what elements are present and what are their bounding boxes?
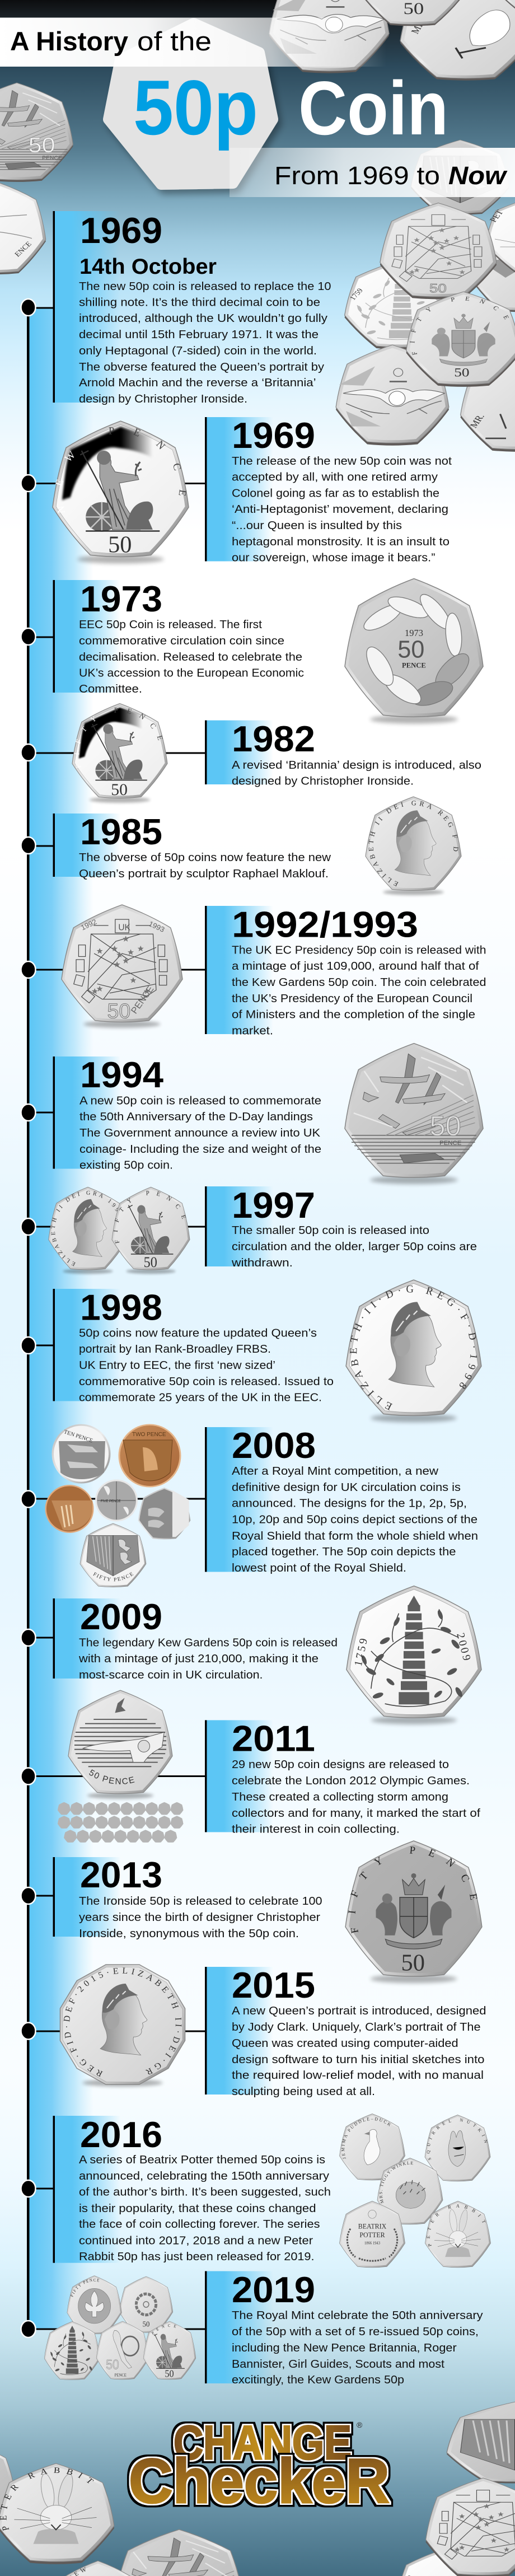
2009: body text: most-scarce coin in UK circulation. <box>79 1668 263 1681</box>
coin: Peter Rabbit small: PETER RABBIT <box>427 2204 486 2246</box>
title: A History of the: A History <box>10 26 128 56</box>
coin: 1969 Britannia New Pence: 50 <box>108 531 132 558</box>
1973: year: 1973 <box>80 578 162 619</box>
1969 left block background <box>53 211 121 403</box>
2008: body text: After a Royal Mint competition, a new <box>232 1465 438 1478</box>
2011: body text: collectors and for many, it marked the start of <box>232 1807 480 1820</box>
coin: 1985 Makhlouf portrait: ELIZABETH II DEI GRA REG F D <box>368 801 458 887</box>
footer coin: D-Day <box>115 2530 243 2576</box>
1969 right: body text: heptagonal monstrosity. It is an insult to <box>232 535 450 548</box>
1969 right: body text: ‘Anti-Heptagonist’ movement, declaring <box>232 503 448 516</box>
1992/1993: year: 1992/1993 <box>232 904 418 945</box>
footer coin: Peter Rabbit <box>0 2463 114 2564</box>
1969 left: year: 1969 <box>80 210 162 251</box>
1969 right: body text: “...our Queen is insulted by this <box>232 519 402 532</box>
1969 left: body text: introduced, although the UK wouldn’t go fully <box>79 312 328 325</box>
timeline nodes <box>21 299 36 2337</box>
decorative coin: left D-Day: 50 <box>29 133 55 157</box>
coin: 2011 Olympic aquatics: 50 PENCE <box>89 1769 134 1784</box>
logo: Change Checker: CHANGE <box>174 2416 352 2470</box>
2016: body text: of the author’s birth. It’s been suggested, such <box>79 2186 331 2199</box>
title: A History of the: of the <box>137 26 212 56</box>
2019: year: 2019 <box>232 2269 315 2310</box>
1992 block background <box>205 906 273 1034</box>
2011 block background <box>205 1720 273 1832</box>
cluster coin: Royal arms: 50 <box>454 366 469 380</box>
timeline: blue band <box>29 308 93 2329</box>
2015: year: 2015 <box>232 1965 315 2005</box>
coin: 2009 Kew Gardens: 1759 <box>352 1635 371 1667</box>
coin: 5p: FIVE PENCE <box>101 1500 121 1503</box>
1994: body text <box>79 1095 321 1171</box>
1973: body text: decimalisation. Released to celebrate the <box>79 651 302 663</box>
cluster coin: Royal arms: FIFTY PENCE <box>410 297 509 355</box>
1994 block background <box>53 1056 121 1169</box>
2016: body text: is their popularity, that these coins changed <box>79 2202 316 2215</box>
1992/1993: body text: The UK EC Presidency 50p coin is released with <box>232 944 486 957</box>
coins: 2008 Royal Shield set <box>45 1424 190 1587</box>
1982 block background <box>205 721 273 784</box>
2013: body text: Ironside, synonymous with the 50p coin. <box>79 1927 299 1940</box>
coin: 2p <box>119 1424 181 1487</box>
subtitle: From 1969 to Now: From 1969 to <box>274 161 440 190</box>
1998: body text: 50p coins now feature the updated Queen’s <box>79 1327 317 1340</box>
2019: body text <box>232 2309 483 2386</box>
decorative coin: top 50 coin: 50 <box>403 0 424 18</box>
decorative coin: top right stack Mr Jeremy <box>400 0 515 81</box>
decorative cluster coin: shield behind title band <box>411 140 509 215</box>
coin: Beatrix Potter portrait ring: POTTER <box>359 2231 386 2239</box>
2009: body text <box>78 1637 338 1681</box>
subtitle band <box>230 148 515 197</box>
coin: Mrs Tiggy-Winkle <box>377 2158 443 2224</box>
subtitle: From 1969 to Now: Now <box>448 161 508 190</box>
coins: 1997 smaller 50p pair <box>48 1187 190 1275</box>
coin: 1969 Britannia New Pence <box>52 420 189 566</box>
coin: 2009 Kew Gardens: 2009 <box>454 1631 474 1664</box>
2011: body text <box>232 1758 480 1835</box>
coin: Girl Guides <box>119 2276 173 2332</box>
1998: body text: commemorative 50p coin is released. Issued to <box>79 1375 334 1388</box>
timeline: black spine <box>27 307 29 2329</box>
2015: body text: by Jody Clark. Uniquely, Clark’s portrait of The <box>232 2021 480 2033</box>
coin: Scouts <box>67 2276 121 2334</box>
2016: body text: the face of coin collecting forever. The series <box>79 2218 320 2231</box>
2011: body text: These created a collecting storm among <box>232 1790 448 1803</box>
coin: 1997 Britannia <box>112 1187 190 1275</box>
footer coin: shield right <box>447 2402 515 2483</box>
1985: body text <box>79 851 331 880</box>
1982: body text: designed by Christopher Ironside. <box>232 775 414 787</box>
1973: body text: EEC 50p Coin is released. The first <box>79 618 262 631</box>
coin: 20p <box>138 1488 190 1539</box>
2008: year: 2008 <box>232 1425 316 1466</box>
2019: body text: of the 50p with a set of 5 re-issued 50p coins, <box>232 2325 479 2338</box>
1994: body text: coinage- Including the size and weight of the <box>79 1143 321 1156</box>
footer coin: Kew right <box>396 2548 500 2576</box>
2015: body text: A new Queen’s portrait is introduced, designed <box>232 2004 486 2017</box>
coin: New Pence Britannia small: 50 <box>165 2368 174 2379</box>
footer coin: small left behind <box>0 2441 16 2529</box>
coin: New Pence Britannia small <box>143 2321 196 2379</box>
coin: 5p <box>95 1479 138 1522</box>
coin: Jemima Puddle-Duck <box>339 2114 405 2180</box>
1973: body text: commemorative circulation coin since <box>79 634 284 647</box>
2011: body text: 29 new 50p coin designs are released to <box>232 1758 449 1771</box>
1969 left: date: 14th October <box>79 255 217 279</box>
2016: body text: announced, celebrating the 150th anniversary <box>79 2170 330 2182</box>
footer coin: EC right <box>426 2478 515 2576</box>
coin: New Pence Britannia small: PENCE <box>151 2324 176 2335</box>
2019: body text: including the New Pence Britannia, Roger <box>232 2341 457 2354</box>
coins: 2016 Beatrix Potter set <box>339 2114 491 2268</box>
1997: body text <box>231 1224 477 1269</box>
cluster coin: Kew Gardens: 1759 <box>348 287 365 301</box>
decorative coin: top 50 coin <box>362 0 463 26</box>
1973: body text: Committee. <box>79 682 142 695</box>
1992/1993: body text: market. <box>232 1025 273 1037</box>
cluster coin: UK EC presidency: 50 <box>429 282 447 296</box>
1997: body text: The smaller 50p coin is released into <box>232 1224 429 1237</box>
2013 block background <box>53 1857 121 1937</box>
coin: 1992/1993 EC Presidency: 50 <box>107 999 130 1022</box>
coin: 2015 Jody Clark portrait: REG·FID·DEF·2015·ELIZABETH II·DEI·GRA· <box>64 1967 181 2077</box>
2016: body text: continued into 2017, 2018 and a new Peter <box>79 2234 313 2247</box>
decorative coin cluster right of 1969 <box>336 203 515 452</box>
1997: body text: circulation and the older, larger 50p coins are <box>232 1240 477 1253</box>
timeline connectors <box>34 308 205 2329</box>
2008: body text: placed together. The 50p coin depicts the <box>232 1545 456 1558</box>
subtitle: From 1969 to Now <box>274 161 508 190</box>
1998: body text <box>79 1327 334 1404</box>
coin: 2011 Olympic aquatics <box>68 1690 173 1801</box>
1969 right: body text: The release of the new 50p coin was not <box>232 455 452 467</box>
1969 right block background <box>205 417 273 561</box>
title: A History of the <box>10 26 212 56</box>
coin: Beatrix Potter portrait ring: 1866 1943 <box>364 2241 381 2245</box>
1969 right: body text: Colonel going as far as to establish the <box>232 487 439 500</box>
cluster coin: Mr Jeremy: MR. <box>467 412 486 429</box>
1997 block background <box>205 1186 273 1266</box>
coin: Squirrel Nutkin: SQUIRREL NUTKIN <box>427 2119 488 2160</box>
coin: Beatrix Potter portrait ring: BEATRIX <box>358 2223 387 2231</box>
logo: Change Checker: CheckeR <box>129 2446 390 2516</box>
coin: 1992/1993 EC Presidency: 1993 <box>147 919 166 934</box>
coin: 2013 Ironside arms: 50 <box>401 1949 425 1976</box>
2016: body text <box>79 2153 331 2263</box>
2016: body text: Rabbit 50p has just been released for 2019. <box>79 2250 315 2263</box>
coin: 50p shield: FIFTY PENCE <box>93 1572 133 1581</box>
1998: body text: UK Entry to EEC, the first ‘new sized’ <box>79 1359 275 1372</box>
cluster coin: Royal arms <box>406 291 515 387</box>
1985: body text: The obverse of 50p coins now feature the new <box>79 851 331 864</box>
coin: 1997 Britannia: FIFTY PENCE <box>113 1191 186 1244</box>
decorative coin: top swimmer <box>269 0 389 73</box>
coin: 2p: TWO PENCE <box>132 1432 166 1438</box>
2011: body text: celebrate the London 2012 Olympic Games. <box>232 1774 470 1787</box>
coin: Jemima Puddle-Duck: JEMIMA PUDDLE–DUCK <box>341 2117 391 2159</box>
coin: 1973 EEC hands: 50 <box>397 636 424 663</box>
1969 left: body text: The new 50p coin is released to replace the 10 <box>79 280 331 293</box>
coins: 2019 anniversary set <box>44 2276 196 2379</box>
footer coin: Peter Rabbit: PETER RABBIT <box>0 2467 94 2531</box>
2015: body text: the required low-relief model, with no manual <box>232 2069 484 2082</box>
1992/1993: body text <box>232 944 486 1037</box>
cluster coin: Mr Jeremy <box>461 356 515 452</box>
2013: year: 2013 <box>80 1854 162 1895</box>
1985: body text: Queen’s portrait by sculptor Raphael Maklouf. <box>79 867 329 880</box>
coin: 2009 Kew Gardens <box>347 1586 481 1724</box>
coin: 10p: TEN PENCE <box>63 1429 93 1444</box>
1992/1993: body text: the UK’s Presidency of the European Council <box>232 992 472 1005</box>
1969 right: body text: accepted by all, with one retired army <box>232 471 438 484</box>
1969 right: year: 1969 <box>232 415 315 456</box>
coin: 1973 EEC hands: 1973 <box>405 628 423 638</box>
1982: body text <box>232 759 481 787</box>
cluster coin: UK EC presidency <box>380 203 497 299</box>
coin: 1982 Britannia Fifty Pence: FIFTY PENCE <box>74 708 163 768</box>
coin: 2013 Ironside arms: FIFTY PENCE <box>348 1846 477 1934</box>
2015: body text: Queen was created using computer-aided <box>232 2037 458 2050</box>
1997: body text: withdrawn. <box>231 1256 293 1269</box>
1998 block background <box>53 1289 121 1401</box>
2011: year: 2011 <box>232 1718 315 1759</box>
title hexagon background <box>109 24 273 184</box>
1969 left: body text: decimal until 15th February 1971. It was the <box>79 328 319 341</box>
cluster coin: Team GB swimmer <box>336 345 449 446</box>
coin: Squirrel Nutkin <box>424 2115 490 2181</box>
coin: Roger Bannister <box>96 2321 149 2379</box>
1994: year: 1994 <box>80 1054 163 1095</box>
coin: Roger Bannister: 50 <box>106 2357 119 2372</box>
1973: body text <box>79 618 304 695</box>
2009: body text: The legendary Kew Gardens 50p coin is released <box>79 1637 338 1649</box>
1969 left: body text: The obverse featured the Queen’s portrait by <box>79 361 325 373</box>
1969 left: body text: only Heptagonal (7-sided) coin in the world. <box>79 344 317 357</box>
coin: 1992/1993 EC Presidency: PENCE <box>129 984 156 1016</box>
coin: 2013 Ironside arms <box>345 1840 483 1985</box>
footer coin: New Pence edge <box>54 2561 142 2576</box>
2019: body text: Bannister, Girl Guides, Scouts and most <box>232 2358 444 2371</box>
1973 block background <box>53 580 121 693</box>
2015: body text: design software to turn his initial sketches into <box>232 2053 485 2066</box>
1992/1993: body text: of Ministers and the completion of the single <box>232 1008 475 1021</box>
1973: body text: UK’s accession to the European Economic <box>79 666 304 680</box>
coin: 1992/1993 EC Presidency: 1992 <box>79 918 98 932</box>
coin: Kew Gardens small <box>44 2321 100 2379</box>
coin: Beatrix Potter portrait ring <box>339 2201 405 2268</box>
2016: year: 2016 <box>80 2114 162 2155</box>
title: Coin: Coin <box>298 66 448 151</box>
2008: body text: definitive design for UK circulation coins is <box>232 1481 461 1494</box>
2015: body text <box>232 2004 486 2098</box>
coin: 1p <box>45 1485 94 1533</box>
coin: 1997 Britannia: 50 <box>144 1255 157 1270</box>
coin: Scouts: FIFTY PENCE <box>71 2279 100 2297</box>
coin: Mrs Tiggy-Winkle: MRS. TIGGY-WINKLE <box>380 2161 413 2204</box>
2011: body text: their interest in coin collecting. <box>232 1823 400 1835</box>
cluster coin: Peter Rabbit edge <box>485 196 515 273</box>
top title band <box>0 18 386 67</box>
2016 block background <box>53 2116 121 2263</box>
coin: 1982 Britannia Fifty Pence <box>72 703 168 805</box>
decorative coin: left D-Day: PENCE <box>42 155 62 161</box>
coin: 1969 Britannia New Pence: NEW PENCE <box>55 427 186 514</box>
cluster coin: Kew Gardens <box>345 260 459 349</box>
2009 block background <box>53 1598 121 1679</box>
2019: body text: excitingly, the Kew Gardens 50p <box>232 2373 404 2386</box>
coin: Roger Bannister: PENCE <box>115 2373 127 2377</box>
coin: 1992/1993 EC Presidency <box>62 905 182 1028</box>
1969 left: body text <box>79 280 331 405</box>
1992/1993: body text: a mintage of just 109,000, around half that of <box>232 960 479 973</box>
coin: Girl Guides: 50 <box>143 2320 150 2329</box>
cluster coin: rabbit behind <box>471 224 515 312</box>
coin: 1994 D-Day <box>345 1044 483 1184</box>
2013: body text: years since the birth of designer Christopher <box>79 1911 320 1924</box>
coin: 1973 EEC hands: PENCE <box>402 661 426 669</box>
coin: 1997 Queen: ELIZABETH II DEI GRA 1997 <box>51 1190 118 1266</box>
1982: year: 1982 <box>232 718 315 759</box>
coin: Peter Rabbit small <box>425 2201 490 2268</box>
coin: 1982 Britannia Fifty Pence: 50 <box>111 780 128 799</box>
2008 block background <box>205 1427 273 1572</box>
1992/1993: body text: the Kew Gardens 50p coin. The coin celebrated <box>232 976 486 989</box>
2015: body text: sculpting being used at all. <box>232 2085 375 2098</box>
decorative coin: left lower <box>0 182 46 274</box>
coin: 1998 Rank-Broadley portrait: ELIZABETH·II·D·G REG·F·D·1998 <box>350 1285 477 1410</box>
1998: year: 1998 <box>80 1287 162 1328</box>
2013: body text <box>79 1895 322 1940</box>
coin: 1994 D-Day: 50 <box>429 1110 461 1142</box>
2015 block background <box>205 1967 273 2095</box>
cluster coin: Peter Rabbit edge: PET <box>488 209 505 223</box>
decorative coin: top right stack Mr Jeremy: MR. <box>409 17 428 35</box>
2008: body text: Royal Shield that form the whole shield when <box>232 1530 478 1542</box>
1985: year: 1985 <box>80 811 162 852</box>
1969 left: body text: design by Christopher Ironside. <box>79 392 247 405</box>
1969 left: body text: shilling note. It’s the third decimal coin to be <box>79 296 320 309</box>
coin: 50p shield <box>79 1523 147 1587</box>
2016: body text: A series of Beatrix Potter themed 50p coins is <box>79 2153 325 2166</box>
1997: year: 1997 <box>232 1185 315 1226</box>
title: 50p: 50p <box>133 64 258 151</box>
2008: body text: announced. The designs for the 1p, 2p, 5p, <box>232 1497 467 1510</box>
coin: 1973 EEC hands <box>345 579 483 723</box>
coin: 10p <box>52 1424 111 1484</box>
2019 block background <box>205 2271 273 2383</box>
decorative coin: left lower: ENCE <box>13 240 33 258</box>
1994: body text: existing 50p coin. <box>79 1159 173 1171</box>
1994: body text: The Government announce a review into UK <box>79 1126 320 1139</box>
logo: Change Checker <box>129 2416 390 2516</box>
2008: body text: lowest point of the Royal Shield. <box>232 1562 406 1574</box>
decorative coin: left D-Day <box>0 83 73 182</box>
2008: body text: 10p, 20p and 50p coins depict sections of the <box>232 1513 477 1526</box>
1985 block background <box>53 814 121 877</box>
1994: body text: A new 50p coin is released to commemorate <box>79 1095 321 1107</box>
29 Olympic coin designs pictogram <box>58 1802 184 1843</box>
1994: body text: the 50th Anniversary of the D-Day landings <box>79 1110 313 1123</box>
logo: Change Checker: ® <box>357 2420 363 2429</box>
decorative coin: top right corner <box>494 0 515 12</box>
2008: body text <box>232 1465 478 1574</box>
1969 right: body text: our sovereign, whose image it bears.” <box>232 551 436 564</box>
coin: 1992/1993 EC Presidency: UK <box>118 923 131 933</box>
2019: body text: The Royal Mint celebrate the 50th anniversary <box>232 2309 483 2322</box>
1998: body text: commemorate 25 years of the UK in the EEC. <box>79 1391 322 1404</box>
1969 right: body text <box>232 455 452 564</box>
2009: year: 2009 <box>80 1596 162 1637</box>
2009: body text: with a mintage of just 210,000, making it the <box>78 1652 319 1665</box>
1998: body text: portrait by Ian Rank-Broadley FRBS. <box>79 1343 271 1355</box>
coin: 1994 D-Day: PENCE <box>439 1140 462 1147</box>
2013: body text: The Ironside 50p is released to celebrate 100 <box>79 1895 322 1908</box>
1969 left: body text: Arnold Machin and the reverse a ‘Britannia’ <box>79 376 316 389</box>
1982: body text: A revised ‘Britannia’ design is introduced, also <box>232 759 481 772</box>
